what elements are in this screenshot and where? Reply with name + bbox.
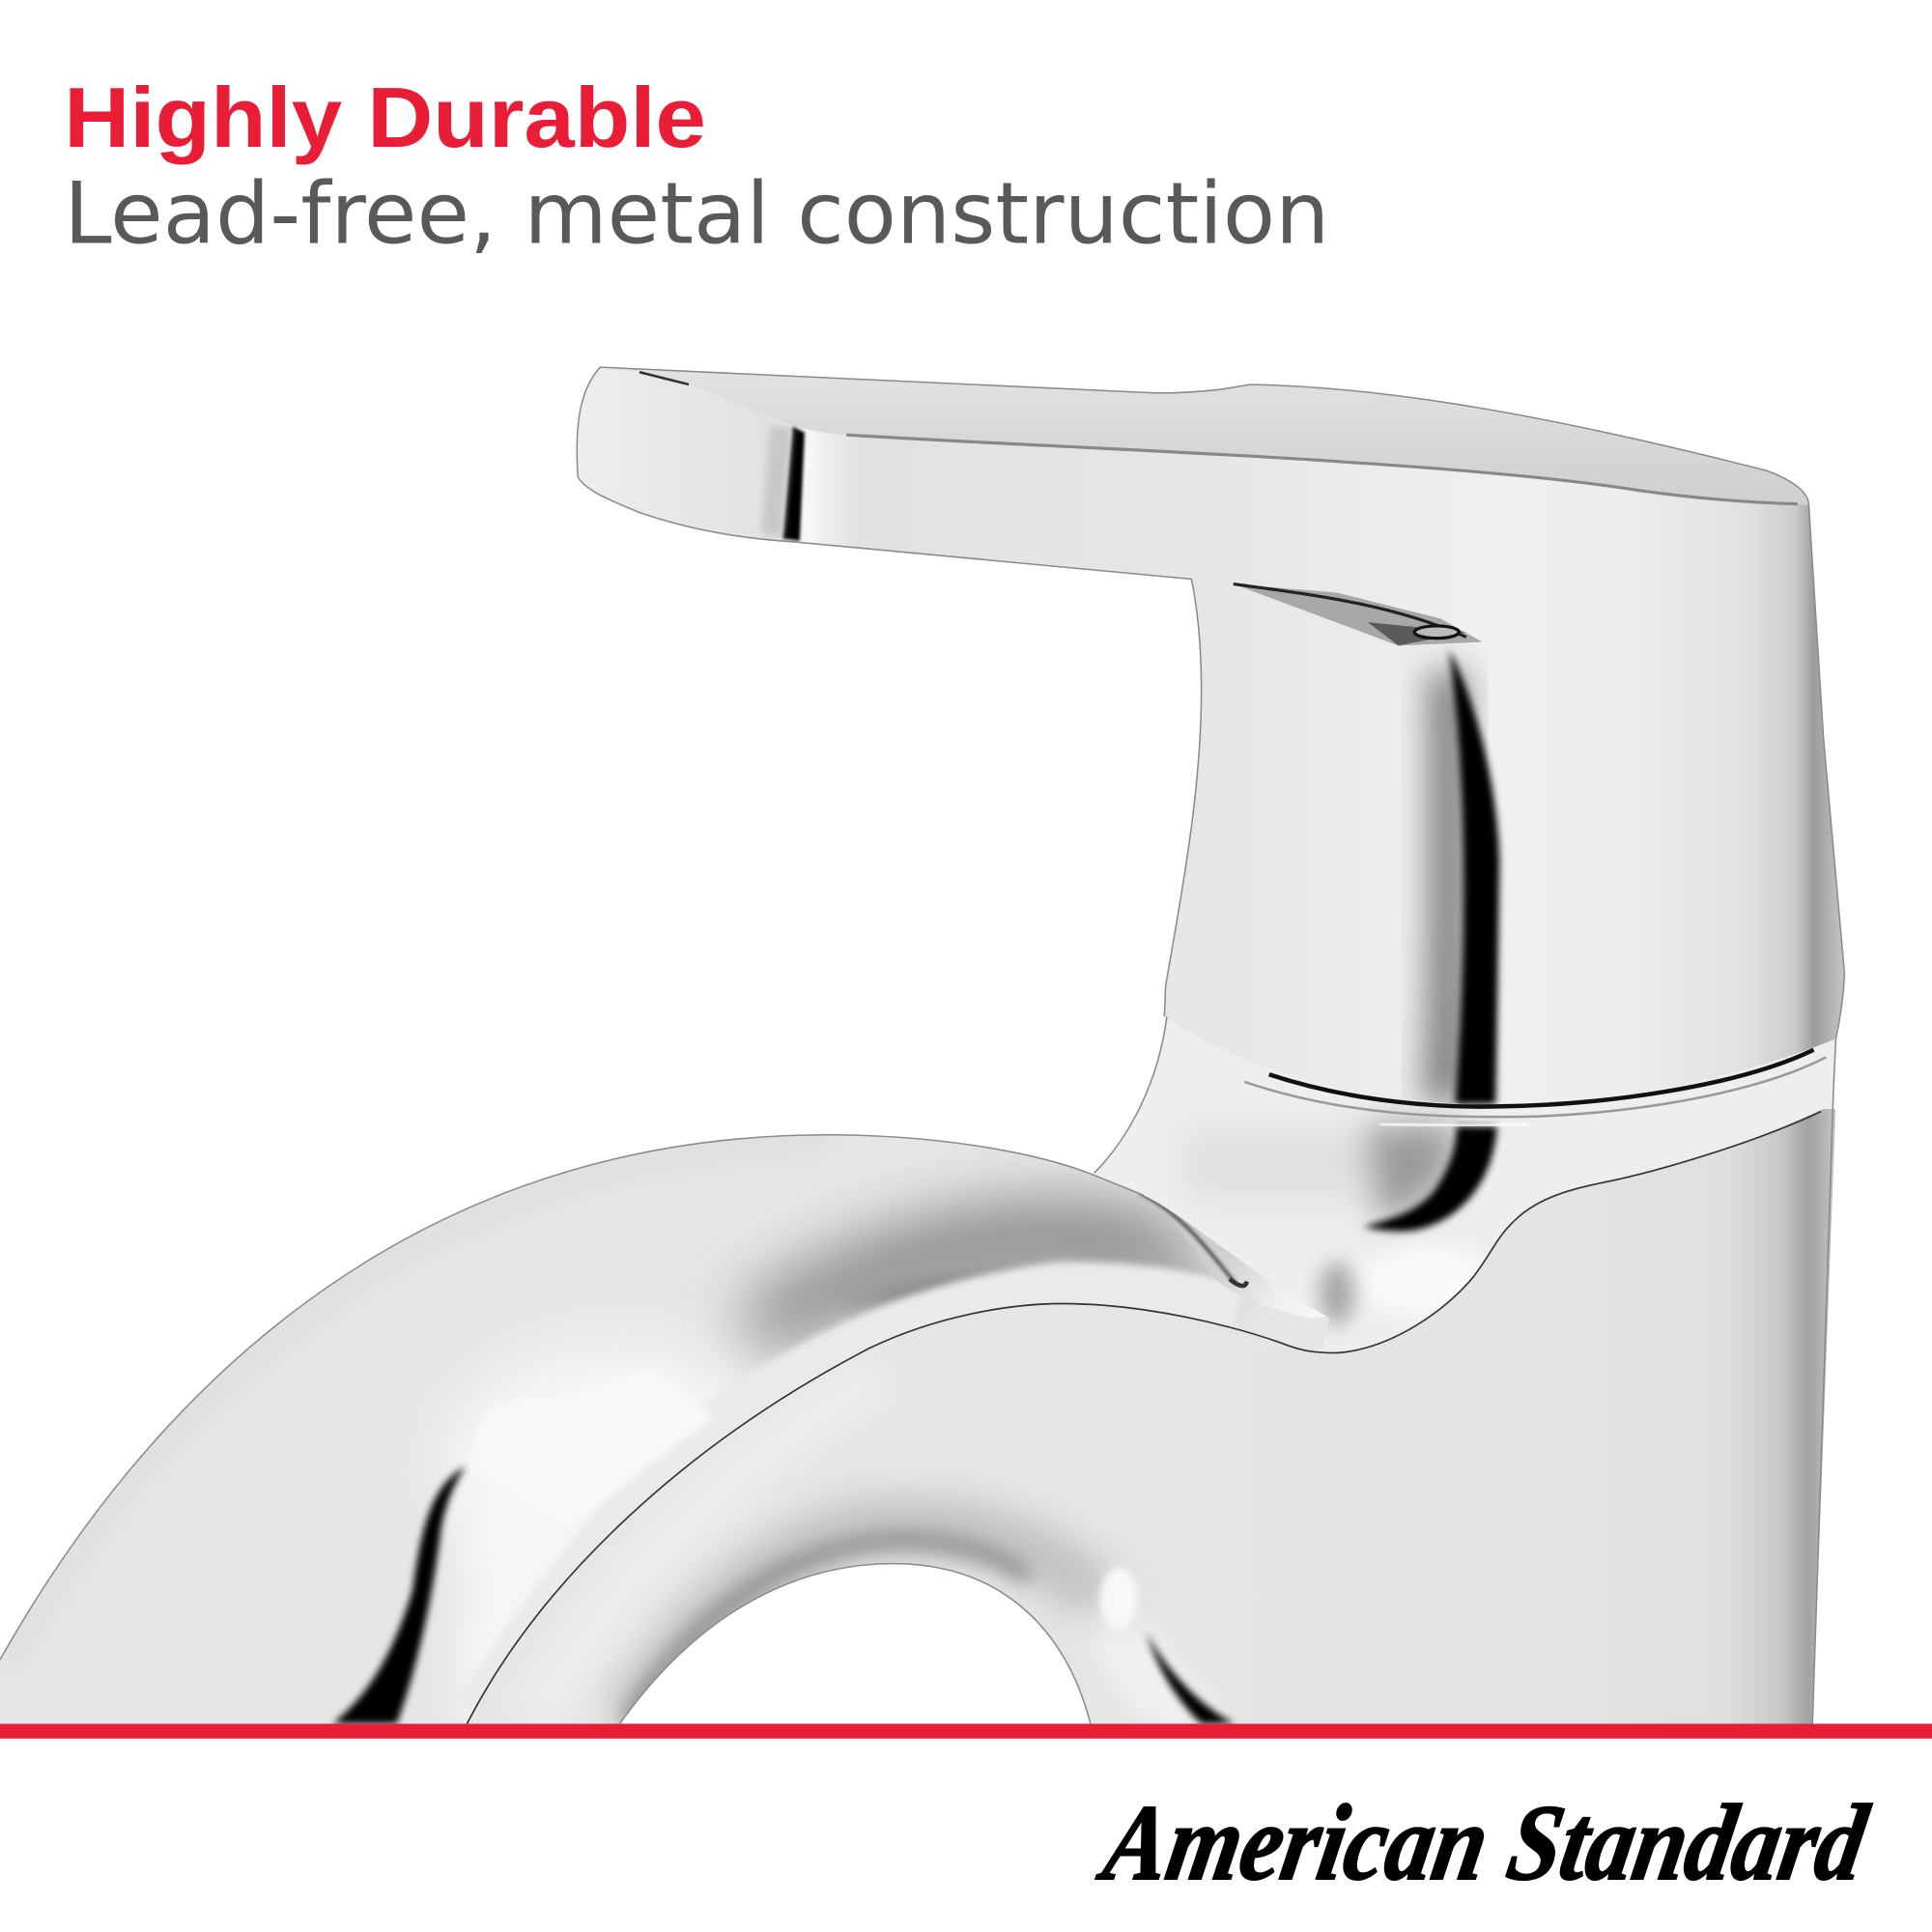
red divider band bbox=[0, 1723, 1932, 1739]
faucet neck and body bbox=[1095, 1018, 1835, 1352]
handle dark reflection bbox=[1423, 671, 1466, 1103]
spout arc bbox=[0, 1136, 1329, 1723]
lever underside reflection bbox=[1234, 584, 1482, 645]
lever top surface bbox=[600, 367, 1808, 505]
spout seam line bbox=[467, 1112, 1821, 1723]
collar white highlight bbox=[1380, 1123, 1528, 1125]
faucet illustration bbox=[0, 357, 1861, 1749]
lever handle and cap bbox=[567, 357, 1861, 1122]
faucet basin opening bbox=[620, 1564, 1091, 1723]
subheading: Lead-free, metal construction bbox=[64, 163, 1329, 263]
collar dark line bbox=[1269, 1050, 1814, 1107]
spout notch detail bbox=[1173, 1222, 1325, 1318]
collar lower line bbox=[1244, 1057, 1826, 1117]
heading: Highly Durable bbox=[64, 70, 706, 165]
faucet outlines bbox=[0, 367, 1844, 1723]
faucet front body bbox=[456, 1109, 1848, 1749]
